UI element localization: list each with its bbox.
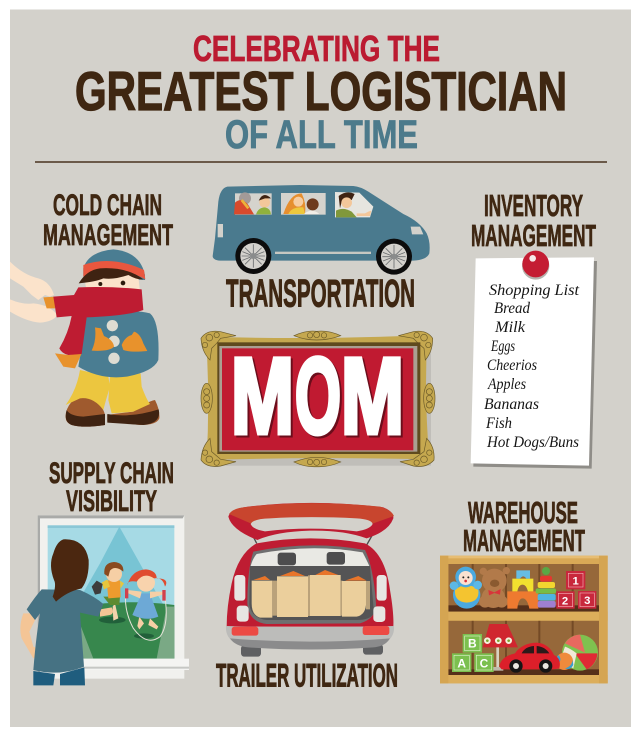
frame ornaments: [201, 331, 435, 467]
mountain: [73, 527, 167, 610]
window frame: [38, 515, 184, 679]
coat: [78, 311, 159, 377]
MOM text: O: [297, 337, 343, 458]
shelf boards: [440, 556, 608, 683]
shopping list items: Eggs: [490, 338, 515, 355]
MOM text: M: [343, 337, 406, 458]
shopping list items: Apples: [487, 376, 526, 393]
trousers: [66, 370, 150, 413]
note paper: [471, 257, 594, 466]
boy with toy: [92, 562, 126, 623]
icon: mom watching children through window: [20, 515, 189, 685]
MOM text: M: [233, 337, 296, 458]
scarf: [53, 287, 143, 355]
toy balls: [556, 635, 598, 671]
letter blocks: A: [457, 656, 466, 670]
icon: toy shelves: [440, 556, 608, 683]
wheels: [241, 644, 383, 657]
shopping list items: Bananas: [484, 396, 539, 413]
passengers: [234, 192, 371, 217]
boot opening: [247, 545, 376, 624]
roly-poly doll: [450, 567, 482, 609]
heading: cold chain management: [43, 189, 173, 252]
letter blocks: C: [480, 656, 489, 670]
number blocks: 3: [584, 595, 590, 607]
hat: [83, 249, 145, 280]
girl with skipping rope: [125, 569, 166, 640]
shopping list items: [484, 282, 580, 451]
MOM text: M: [341, 335, 404, 456]
hair: [79, 268, 143, 283]
MOM text: O: [295, 335, 341, 456]
shelf back panels: [448, 564, 599, 611]
icon: bundled child with scarf: [10, 249, 159, 427]
number blocks: 2: [562, 595, 568, 607]
grocery bags: [252, 570, 370, 618]
heading: supply chain visibility: SUPPLY CHAIN: [49, 457, 174, 490]
eyes: [98, 282, 102, 286]
icon: family van: [213, 185, 430, 275]
shopping list items: Bread: [494, 300, 531, 317]
headrests: [278, 552, 345, 565]
adult hands: [10, 262, 57, 323]
shopping list items: Fish: [485, 415, 512, 432]
note shadow: [473, 261, 597, 469]
mother from behind: [20, 539, 113, 685]
window sky: [48, 525, 174, 659]
boots: [66, 397, 159, 427]
number blocks: 1: [573, 575, 579, 587]
stacking rings: [536, 567, 556, 608]
letter blocks: B: [468, 637, 477, 651]
icon: gold picture frame with MOM: [201, 331, 435, 467]
rear and front lights: [218, 224, 223, 237]
car body: [227, 538, 393, 627]
shopping list items: Shopping List: [489, 282, 580, 299]
gold frame: [206, 335, 429, 460]
tail lights: [234, 575, 387, 622]
frame shadow: [209, 342, 431, 466]
heading: supply chain visibility: VISIBILITY: [66, 485, 157, 518]
bumper: [226, 626, 394, 648]
teddy bear: [479, 567, 510, 608]
shopping list items: Hot Dogs/Buns: [486, 434, 579, 451]
shopping list items: Milk: [494, 319, 526, 336]
shopping list items: Cheerios: [487, 357, 537, 374]
heading: transportation: TRANSPORTATION: [226, 272, 415, 316]
red toy car: [499, 643, 560, 673]
title line 1: CELEBRATING THE: [193, 28, 440, 69]
heading: supply chain visibility: [49, 457, 174, 518]
title line 3: OF ALL TIME: [225, 113, 418, 157]
MOM text: M: [231, 335, 294, 456]
van body: [213, 185, 430, 261]
buttons: [107, 320, 120, 364]
van windows: [235, 192, 373, 217]
table lamp: [483, 624, 518, 671]
heading: inventory management: [471, 188, 596, 253]
heading: cold chain management: COLD CHAIN: [53, 189, 162, 222]
title: [75, 28, 567, 157]
MOM text: [231, 335, 406, 458]
shelf frame: [440, 556, 608, 683]
icon: open car boot with grocery bags: [226, 503, 394, 657]
scarf fringe: [43, 297, 82, 368]
van wheels: [235, 238, 412, 275]
open tailgate: [228, 503, 393, 540]
face: [85, 274, 140, 292]
letter blocks: [452, 634, 494, 672]
pinned shopping list: [471, 251, 597, 469]
heading: warehouse management: [463, 495, 585, 558]
window sill: [78, 659, 189, 670]
red panel: [222, 348, 413, 450]
number blocks: [556, 571, 596, 609]
inner frame edge: [217, 342, 420, 454]
heading: cold chain management: MANAGEMENT: [43, 219, 173, 252]
toy arch blocks: [507, 570, 538, 609]
heading: trailer utilization: TRAILER UTILIZATION: [216, 658, 398, 694]
mittens: [92, 327, 147, 352]
boot struts: [251, 532, 373, 545]
pin: [522, 252, 549, 280]
grass: [48, 602, 174, 659]
